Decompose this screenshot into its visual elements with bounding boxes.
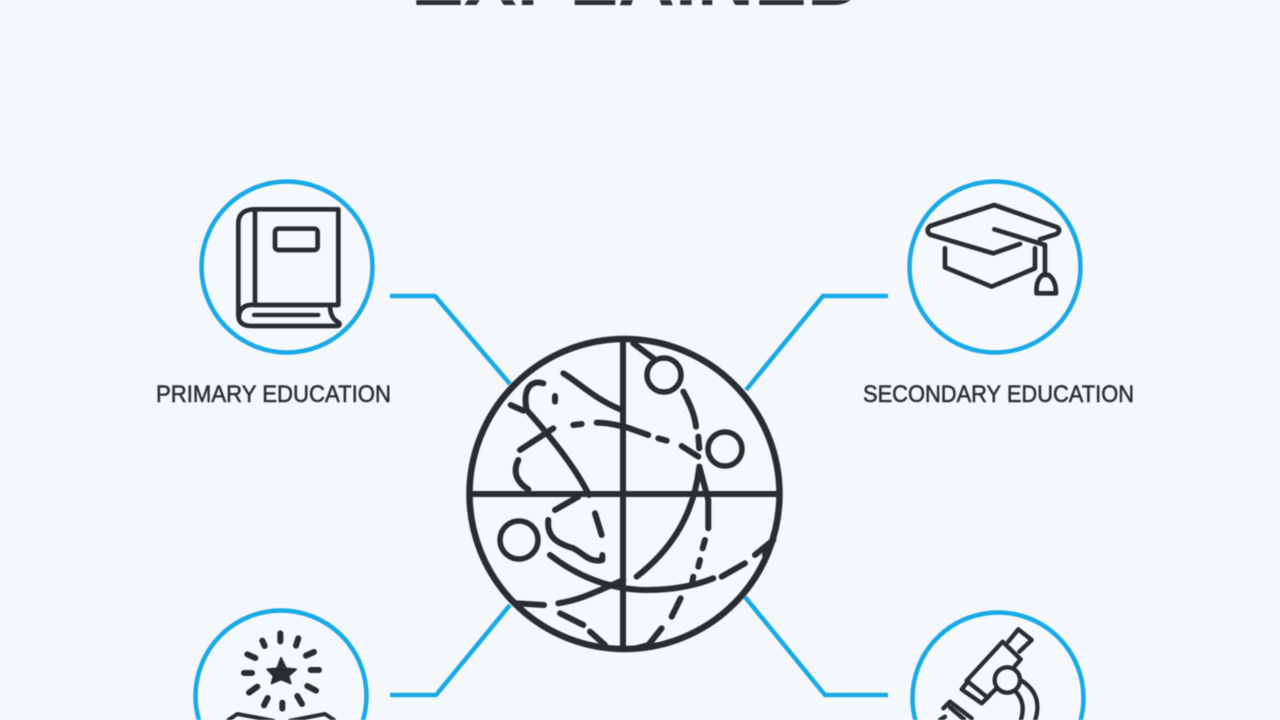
icon ring: bottom right [912,612,1084,720]
icon: star with rays over open book [228,633,334,720]
panel: primary education [156,182,391,408]
icon ring: bottom left [196,610,366,720]
globe meridians and equator [470,340,780,648]
globe disc [470,339,780,649]
icon: graduation cap [928,205,1059,293]
panel: bottom right [912,612,1084,720]
connector: secondary education [746,296,888,390]
globe orbits and continents [511,343,773,648]
icon: microscope [940,629,1037,720]
connector: bottom right [745,597,888,695]
panel: secondary education [863,182,1134,408]
label: secondary education: SECONDARY EDUCATION [863,381,1134,408]
icon: book [238,209,340,326]
globe marker: north [647,358,681,392]
panel: bottom left [196,610,366,720]
icon ring: secondary education [910,182,1080,352]
connector: primary education [390,296,510,384]
icon ring: primary education [202,182,372,352]
central globe [470,339,780,649]
globe marker: west [500,521,538,559]
connector: bottom left [390,605,510,695]
globe marker: east [708,432,742,466]
label: primary education: PRIMARY EDUCATION [156,381,391,408]
